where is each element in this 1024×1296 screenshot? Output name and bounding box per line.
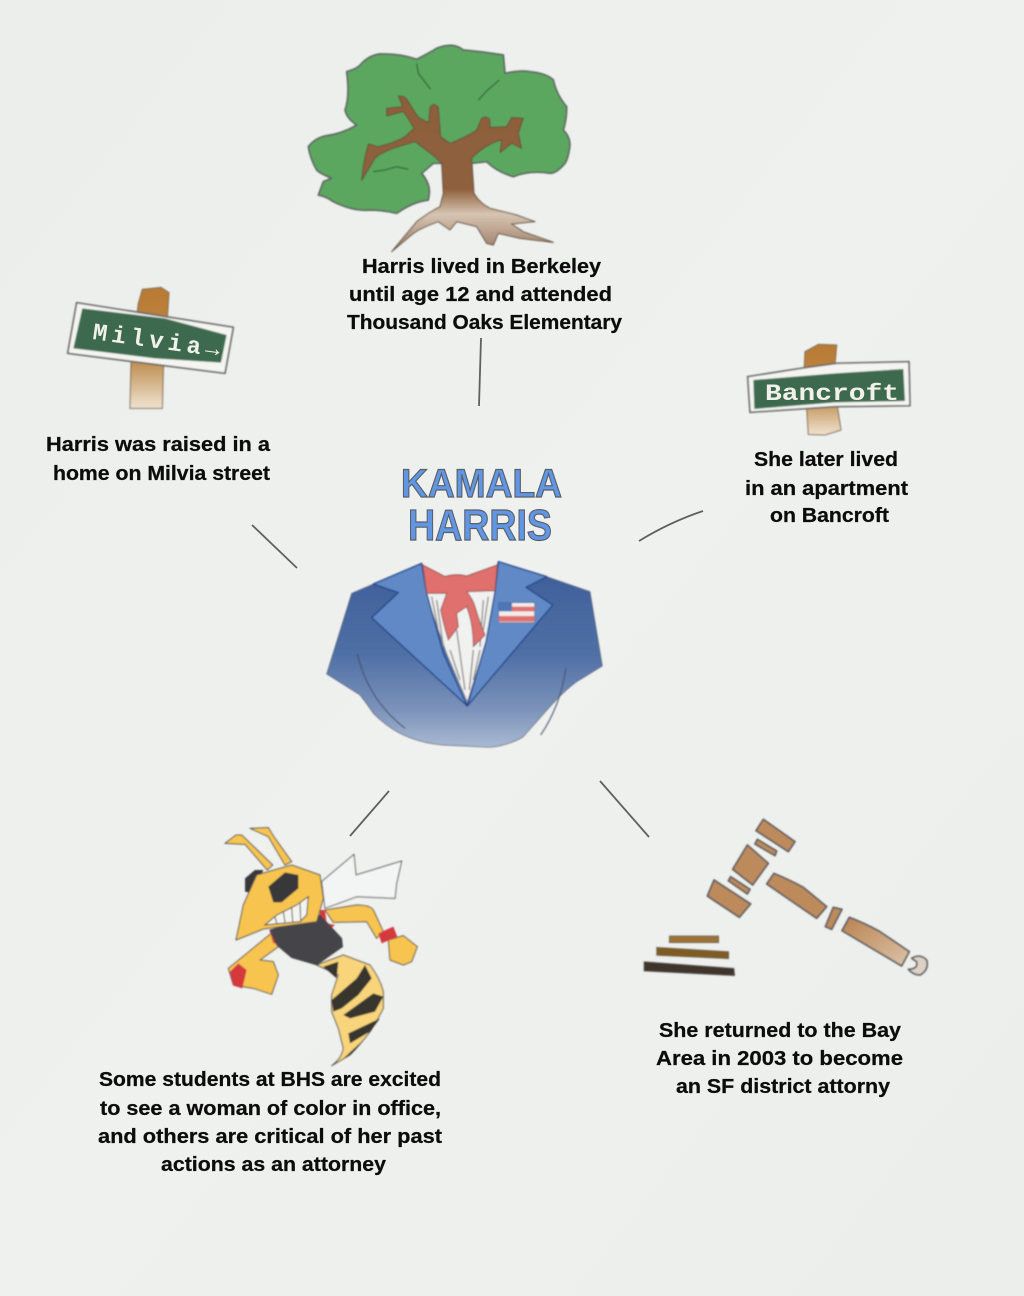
text: Milvia caption: home on Milvia street [53, 463, 270, 485]
text: Bancroft caption: on Bancroft [770, 505, 889, 527]
icon: yellow jacket hornet [225, 828, 417, 1066]
left arm and fist [228, 932, 278, 994]
head [236, 865, 323, 940]
handle knob [908, 956, 927, 975]
wrist bands and shoulder bands [230, 910, 397, 988]
icon: tree [308, 45, 570, 252]
connector: Milvia to center [252, 525, 297, 568]
illustration: blue suit [327, 562, 602, 747]
jacket body [327, 562, 602, 747]
text: Milvia caption: Harris was raised in a [46, 434, 271, 456]
white shirt [425, 591, 496, 702]
sleeve creases [357, 654, 566, 735]
black torso [270, 915, 343, 965]
teeth [265, 897, 308, 925]
text: BHS students caption: Some students at BHS are excited [99, 1069, 441, 1091]
sign panel [73, 308, 227, 363]
connector: Bancroft to center [639, 511, 703, 541]
right arm [325, 905, 383, 938]
text: Bancroft caption [745, 449, 908, 527]
sound block top [669, 936, 719, 943]
text: Berkeley caption: until age 12 and attended [349, 284, 612, 306]
handle section one [767, 873, 827, 918]
sign board [748, 362, 910, 412]
text: Berkeley caption [347, 256, 623, 334]
text: Berkeley caption: Harris lived in Berkeley [362, 256, 602, 278]
connector: suit to hornet [350, 791, 389, 836]
sound block base [644, 962, 735, 976]
title: Kamala Harris [401, 462, 562, 550]
canopy inner lines [373, 63, 499, 172]
icon: Bancroft street sign [748, 344, 910, 435]
sign post [804, 344, 841, 435]
icon: gavel [644, 819, 927, 976]
gavel bottom ring [728, 877, 750, 894]
tree trunk and branches [362, 96, 553, 252]
text: Bay Area caption: an SF district attorny [676, 1076, 891, 1098]
title: Kamala Harris: KAMALA [401, 462, 562, 506]
text: BHS students caption [98, 1069, 442, 1176]
left lapel [372, 563, 467, 706]
red neckerchief [423, 565, 497, 647]
sign panel [753, 369, 905, 409]
handle section two [842, 917, 909, 966]
sign text: Milvia: Milvia→ [91, 320, 222, 365]
text: Milvia caption [46, 434, 271, 485]
handle ring [825, 907, 842, 929]
text: Bay Area caption [656, 1020, 903, 1098]
text: BHS students caption: and others are critical of her past [98, 1126, 442, 1148]
icon: Milvia street sign [68, 287, 233, 408]
shirt hatching [432, 597, 488, 690]
wings [322, 854, 402, 908]
gavel bottom cap [707, 880, 751, 917]
sound block middle [657, 947, 729, 959]
sign post [130, 287, 169, 408]
gavel top cap [756, 819, 795, 852]
sign text: Bancroft: Bancroft [765, 381, 899, 407]
text: BHS students caption: actions as an attorney [161, 1154, 387, 1176]
connector: suit to gavel [600, 781, 649, 837]
back eye [245, 870, 263, 893]
text: Bancroft caption: in an apartment [745, 478, 908, 500]
connector: tree to center [479, 338, 481, 406]
eye [268, 872, 298, 902]
gavel top ring [755, 839, 777, 856]
gavel head center [733, 845, 768, 885]
tooth gaps [275, 902, 301, 923]
text: Bay Area caption: Area in 2003 to become [656, 1048, 903, 1070]
right lapel [467, 562, 553, 706]
sign board [68, 303, 233, 373]
text: Bay Area caption: She returned to the Bay [659, 1020, 902, 1042]
text: BHS students caption: to see a woman of color in office, [100, 1098, 441, 1120]
abdomen [317, 955, 383, 1066]
text: Bancroft caption: She later lived [754, 449, 898, 471]
abdomen stripes [323, 962, 383, 1060]
right fist [388, 936, 417, 965]
antennae [225, 828, 292, 870]
text: Berkeley caption: Thousand Oaks Elementary [347, 312, 623, 334]
tree canopy [308, 45, 570, 213]
title: Kamala Harris: HARRIS [408, 501, 552, 550]
flag pin [499, 603, 535, 623]
